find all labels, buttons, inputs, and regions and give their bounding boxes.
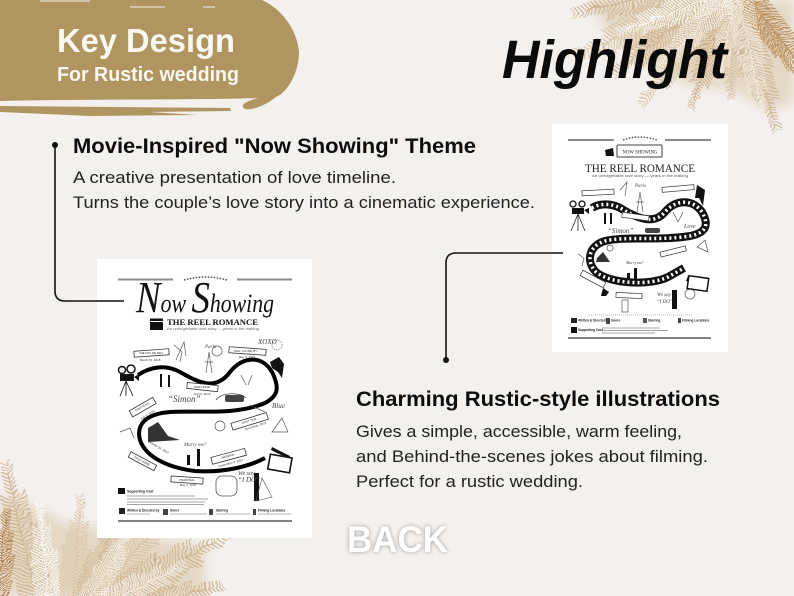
now showing sign bbox=[617, 145, 662, 157]
poster tagline: An unforgettable love story — years in the making bbox=[592, 174, 688, 178]
doodles bbox=[578, 182, 708, 312]
labels: Paris bbox=[634, 184, 646, 189]
poster title: THE REEL ROMANCE bbox=[585, 161, 695, 175]
location and script labels: “I DO” bbox=[238, 476, 260, 484]
banners bbox=[580, 185, 694, 299]
body: theme line 2: Turns the couple’s love story into a cinematic experience. bbox=[73, 193, 535, 212]
heading: Key Design: Key Design bbox=[57, 22, 235, 59]
banner labels: FIRST DATE bbox=[194, 385, 210, 389]
banner labels: FIRST KISS bbox=[134, 401, 150, 413]
location and script labels: Blue bbox=[272, 402, 285, 410]
decoration: pampas top right bbox=[566, 0, 794, 136]
button: BACK: BACK bbox=[347, 519, 448, 560]
credits: Supporting Cast bbox=[127, 490, 154, 494]
gift car bbox=[216, 476, 237, 496]
credits bbox=[118, 488, 291, 515]
credits: Starring bbox=[216, 508, 228, 512]
credits: Written & Directed by bbox=[578, 318, 611, 322]
credits bbox=[571, 315, 709, 333]
panel: Reel Romance poster bbox=[552, 124, 728, 352]
location and script labels: Paris bbox=[204, 345, 216, 350]
labels: “Simon” bbox=[608, 227, 633, 235]
credits: Genre bbox=[611, 318, 620, 322]
text block: movie theme bbox=[73, 134, 535, 212]
location and script labels bbox=[168, 338, 285, 484]
credits: Genre bbox=[170, 508, 179, 512]
body: illustrations line 3: Perfect for a rustic wedding. bbox=[356, 472, 583, 491]
dates: September 4, 2024 bbox=[218, 458, 244, 468]
text block: rustic illustrations bbox=[356, 387, 720, 491]
doodles bbox=[120, 340, 288, 438]
labels: “I DO” bbox=[657, 299, 673, 305]
dates: December, 2018 bbox=[245, 421, 267, 431]
banner: brush stroke with title bbox=[0, 0, 299, 116]
body: illustrations line 2: and Behind-the-scenes jokes about filming. bbox=[356, 447, 708, 466]
location and script labels: Marry me? bbox=[183, 443, 207, 448]
clapper prop small bbox=[687, 276, 709, 291]
decoration: pampas bottom left bbox=[0, 456, 232, 596]
film strip road bbox=[590, 202, 706, 283]
dates: May 3, 2019 bbox=[239, 355, 256, 359]
dates bbox=[139, 355, 267, 487]
banner labels: FIRST HOME bbox=[133, 455, 151, 467]
icon: clapperboard bbox=[150, 318, 163, 330]
connector: illustrations to poster bbox=[443, 253, 563, 363]
banners bbox=[128, 347, 268, 484]
location and script labels: We say bbox=[238, 471, 255, 477]
credits: Filming Locations bbox=[258, 508, 285, 512]
banner labels: FIRST TRIP bbox=[241, 417, 257, 425]
dates: May 4, 2023 bbox=[180, 483, 197, 487]
dates: October 31, 2024 bbox=[147, 440, 170, 455]
banner labels: PROPOSAL bbox=[179, 478, 195, 482]
ornament bbox=[623, 137, 657, 140]
labels bbox=[608, 184, 696, 305]
labels: We say bbox=[657, 293, 672, 298]
button: BACK: BACK bbox=[347, 519, 448, 560]
icon: clapperboard small bbox=[605, 148, 614, 156]
labels: Love bbox=[683, 224, 696, 230]
banner labels: WEDDING bbox=[221, 452, 235, 460]
body: theme line 1: A creative presentation of love timeline. bbox=[73, 168, 396, 187]
connector end over poster bbox=[97, 300, 124, 302]
dates: March 15, 2018 bbox=[140, 358, 161, 362]
poster tagline: An unforgettable love story — years in the making bbox=[167, 327, 259, 331]
connector: theme to poster bbox=[52, 142, 124, 301]
banner labels: WILL YOU BE MY… bbox=[234, 349, 260, 353]
banner labels: THE DAY WE MET bbox=[139, 351, 163, 355]
credits: Written & Directed by bbox=[127, 508, 160, 512]
icon: movie camera bbox=[118, 365, 139, 396]
poster title: THE REEL ROMANCE bbox=[167, 317, 258, 327]
credits: Starring bbox=[648, 318, 660, 322]
icon: movie camera small bbox=[570, 201, 589, 231]
credits: Filming Locations bbox=[682, 318, 709, 322]
heading: theme: Movie-Inspired "Now Showing" Theme bbox=[73, 134, 476, 158]
ornament bbox=[184, 277, 227, 280]
script title: Now Showing bbox=[135, 273, 274, 322]
panel: Now Showing poster bbox=[97, 259, 312, 538]
labels: Marry me? bbox=[625, 260, 644, 265]
heading: illustrations: Charming Rustic-style illustrations bbox=[356, 387, 720, 411]
dates: July 5, 2019 bbox=[139, 409, 156, 421]
location and script labels: XOXO bbox=[257, 338, 277, 346]
location and script labels: “Simon” bbox=[168, 394, 201, 404]
body: illustrations line 1: Gives a simple, accessible, warm feeling, bbox=[356, 422, 682, 441]
dates: April 6, 2019 bbox=[194, 392, 211, 396]
timeline road bbox=[138, 360, 277, 471]
silhouettes bbox=[596, 185, 708, 309]
heading: Highlight: Highlight bbox=[502, 30, 729, 90]
credits: Supporting Cast bbox=[578, 328, 604, 332]
now showing sign: NOW SHOWING bbox=[622, 150, 658, 156]
clapper prop bbox=[268, 447, 292, 473]
banner labels bbox=[133, 349, 260, 482]
wedding car bbox=[216, 394, 246, 400]
silhouettes bbox=[148, 357, 284, 501]
subheading: For Rustic wedding: For Rustic wedding bbox=[57, 64, 239, 86]
